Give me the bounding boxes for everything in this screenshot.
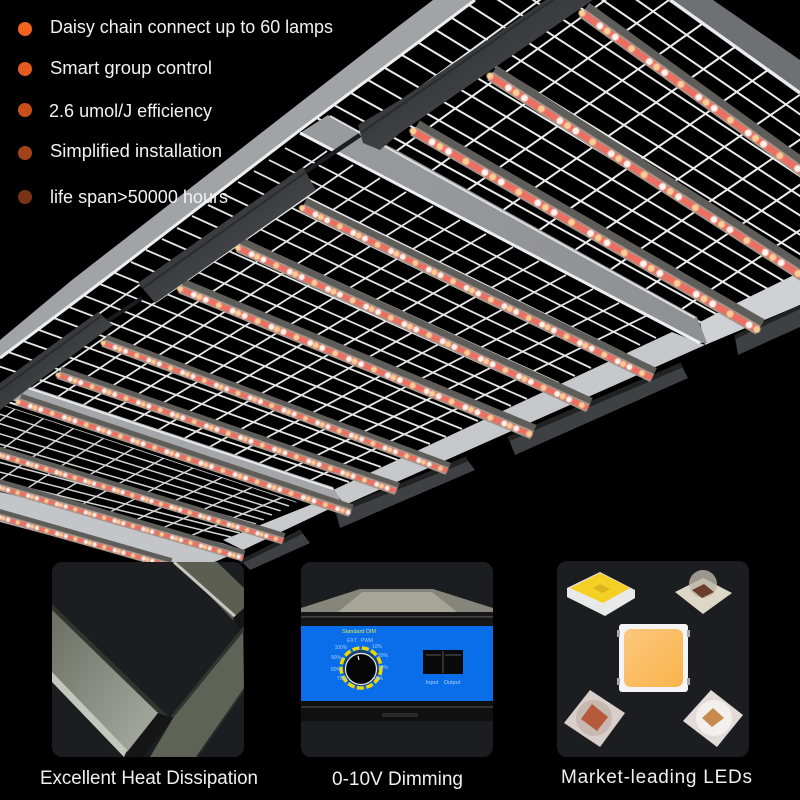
dimmer labels: PWM: [361, 638, 373, 644]
LED strip 2: [490, 72, 800, 294]
connector cable upper: [305, 135, 360, 172]
dimmer labels: 100%: [335, 645, 348, 651]
silver beam C: [0, 492, 243, 566]
RJ45 ports: [423, 650, 463, 674]
heat sink close-up: [52, 562, 244, 760]
dimmer labels: 20%: [378, 653, 389, 659]
LED chip: red left: [564, 690, 625, 747]
LED chip: dome: [675, 570, 732, 614]
dark connection bar 2: [138, 167, 316, 303]
LED strip 1: [582, 9, 800, 192]
dimmer labels: [331, 629, 389, 682]
panel: LEDs: [557, 561, 752, 788]
connector cable lower: [106, 298, 142, 322]
card background: [557, 561, 749, 757]
feature 2 text: Smart group control: [50, 58, 212, 78]
LED chip: yellow: [567, 572, 635, 616]
far frame: middle panel: [333, 332, 705, 505]
dimmer labels: EXT: [347, 638, 357, 644]
bullet 1: [18, 22, 32, 36]
driver housing: [301, 589, 493, 721]
LED strip 11: [0, 473, 244, 558]
LED strip 8: [58, 372, 398, 491]
bullet 2: [18, 62, 32, 76]
driver block 1: [735, 307, 800, 355]
dimmer labels: 30%: [378, 665, 389, 671]
wire mesh: lower panel: [0, 406, 297, 538]
bullet 5: [18, 190, 32, 204]
LED strip 6: [180, 285, 534, 435]
dimmer labels: 90%: [331, 655, 342, 661]
panel: dimming: [301, 562, 493, 790]
feature list: [18, 17, 333, 207]
card background: [52, 562, 244, 757]
port labels: Output: [444, 680, 461, 686]
bullet 3: [18, 103, 32, 117]
card background: [301, 562, 493, 757]
driver block 2: [508, 363, 688, 455]
dark connection bar 3: [0, 312, 113, 410]
driver block 4: [240, 530, 310, 570]
LED chip: warm white centre: [617, 624, 690, 692]
feature 1 text: Daisy chain connect up to 60 lamps: [50, 17, 333, 37]
wire mesh: middle panel: [0, 148, 656, 482]
LED strip 5: [238, 244, 590, 408]
LED strip 7: [103, 340, 449, 471]
feature 3 text: 2.6 umol/J efficiency: [49, 101, 212, 121]
bullet 4: [18, 146, 32, 160]
driver block 3: [335, 457, 475, 528]
feature 5 text: life span>50000 hours: [50, 187, 228, 207]
port labels: [426, 680, 461, 686]
LED strip 3: [413, 127, 761, 330]
feature 4 text: Simplified installation: [50, 141, 222, 161]
far frame: upper panel: [700, 272, 800, 345]
LED strip 10: [0, 440, 284, 541]
dimmer labels: 80%: [331, 667, 342, 673]
caption: 0-10V Dimming: [332, 768, 463, 790]
dimmer labels: 70%: [337, 676, 348, 682]
wire mesh: upper panel: [317, 0, 800, 330]
top right silver rail: [670, 0, 800, 95]
dimmer knob: [341, 648, 381, 688]
LED strip 4: [302, 204, 654, 378]
far frame: lower panel: [223, 490, 342, 550]
LED strip 9: [18, 399, 352, 513]
caption: Excellent Heat Dissipation: [40, 768, 258, 789]
dark connection bar 1: [358, 0, 600, 150]
panel: heat dissipation: [40, 562, 258, 789]
silver beam B: [5, 386, 342, 505]
port labels: Input: [426, 680, 439, 686]
silver beam A: [300, 115, 707, 343]
LED chip: red right: [683, 690, 743, 747]
lamp assembly: [0, 0, 800, 570]
dimmer labels: 10%: [372, 644, 383, 650]
front silver rail: [0, 0, 475, 358]
dimmer labels: Standard DIM: [342, 629, 376, 635]
LED strip 12: [0, 503, 171, 566]
dimmer labels: 40%: [373, 676, 384, 682]
caption: Market-leading LEDs: [561, 767, 752, 788]
